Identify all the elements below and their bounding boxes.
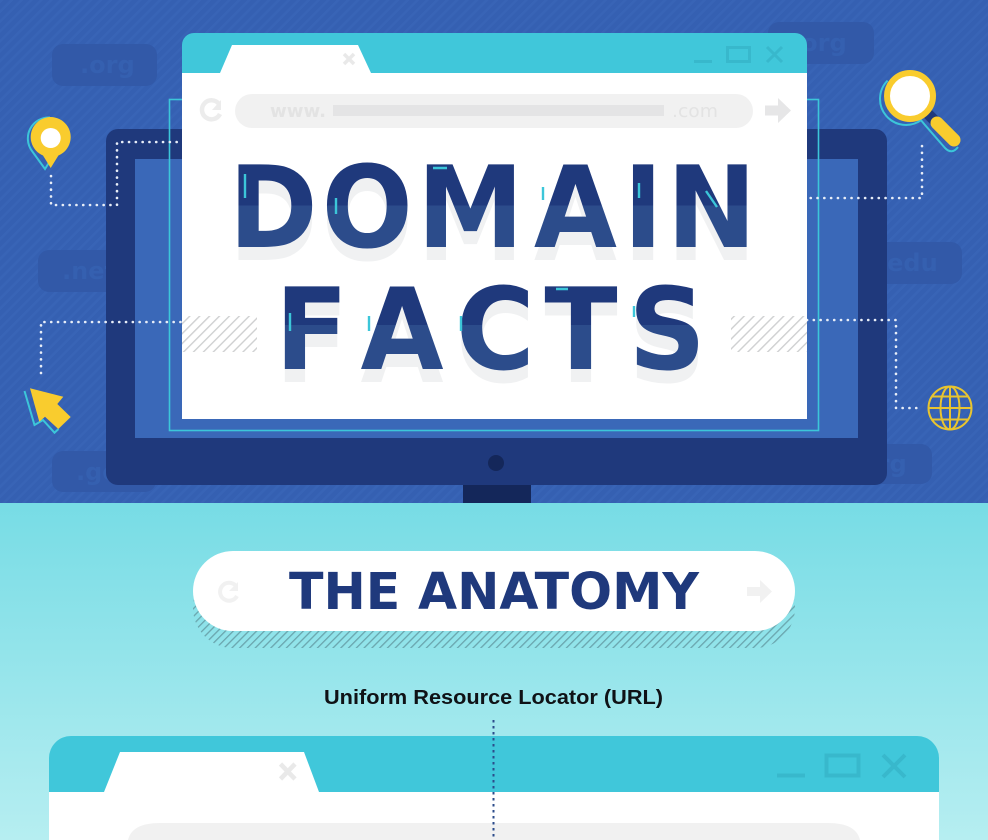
monitor camera (488, 455, 504, 471)
window controls (694, 47, 782, 62)
reload icon (202, 100, 221, 119)
monitor stand (463, 480, 531, 503)
tag: .net (38, 250, 143, 292)
icon: globe (928, 386, 972, 430)
pill reload icon (220, 582, 238, 601)
pill forward arrow (747, 580, 772, 603)
hatch patch right (731, 316, 807, 352)
heading pill: the anatomy (193, 551, 795, 648)
monitor (106, 129, 887, 503)
tag: .org lower right (830, 444, 932, 484)
icon: magnifying glass (880, 73, 958, 151)
lower browser title bar (49, 736, 939, 792)
connector: pin (51, 142, 182, 205)
tag: .edu: .edu (878, 249, 938, 277)
tag: .org lower right: .org (852, 450, 907, 478)
lower tab close icon (280, 764, 295, 779)
connector: cursor (41, 322, 182, 373)
dotted vertical line (492, 720, 494, 840)
heading text: THE ANATOMY (289, 563, 700, 622)
anatomy section background (0, 503, 988, 840)
hero background (0, 0, 988, 503)
teal screen outline (170, 100, 818, 430)
title line: FACTS: FACTS (275, 264, 706, 396)
lower window controls (777, 755, 905, 777)
icon: cursor arrow (24, 388, 71, 433)
browser title bar (182, 33, 807, 73)
pill (193, 551, 795, 631)
lower browser body (49, 780, 939, 840)
icon: map pin (28, 117, 71, 169)
tag: .org right: .org (792, 29, 847, 57)
title: DOMAIN FACTS (229, 142, 756, 396)
tag: .edu (860, 242, 962, 284)
address bar (235, 94, 753, 128)
title line: DOMAIN: DOMAIN (229, 142, 756, 274)
subheading: URL: Uniform Resource Locator (URL) (324, 687, 663, 709)
tag: .org left (52, 44, 157, 86)
dotted connectors (41, 142, 922, 408)
tag: .org right (768, 22, 874, 64)
monitor body (106, 129, 887, 485)
tag: .org left: .org (80, 51, 135, 79)
domain extension tags (38, 22, 962, 492)
tag: .gov (52, 451, 156, 492)
address bar: .com (672, 101, 718, 122)
address bar: www. (270, 101, 326, 122)
connector: globe (807, 320, 918, 408)
connector: magnifier (807, 146, 922, 198)
forward arrow icon (765, 98, 791, 123)
hatch patch left (182, 316, 257, 352)
tag: .net: .net (62, 257, 116, 285)
pill hatch shadow (193, 568, 795, 648)
lower address bar (128, 823, 860, 840)
browser body (182, 60, 807, 419)
title highlight ticks (245, 168, 717, 331)
browser tab (220, 45, 371, 73)
lower browser tab (104, 752, 319, 792)
lower browser window (49, 736, 939, 840)
browser window (182, 33, 807, 419)
tag: .gov: .gov (76, 458, 135, 486)
tab close icon (344, 54, 354, 64)
monitor screen (135, 159, 858, 438)
